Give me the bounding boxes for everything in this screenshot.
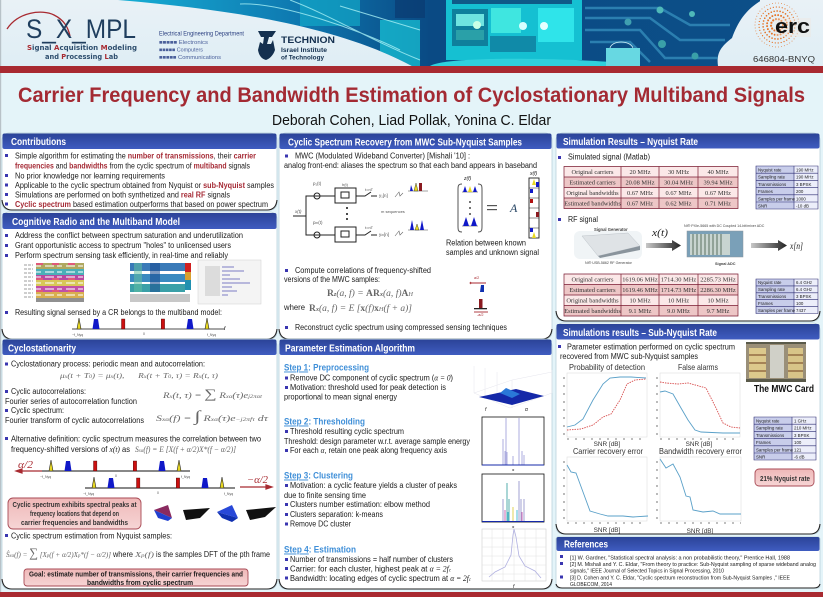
table: RF signal results: Estimated carriers [569, 287, 616, 294]
diagram: MWC block diagram: t=nT [365, 187, 374, 192]
chart: spectrum shifted by alpha over 2: f_Nyq [181, 475, 190, 479]
chart: clustered peaks: α [512, 524, 515, 529]
diagram: MWC block diagram [293, 181, 428, 242]
heading: contributions [2, 134, 276, 149]
heading: parameter estimation [280, 340, 552, 355]
table: RF signal results: 10 MHz [629, 298, 651, 304]
chart: spectrum shifted by alpha over 2: −f_Nyq [40, 475, 51, 479]
table: simulated signal results: 20.08 MHz [625, 180, 655, 186]
table: RF signal settings: Transmissions [758, 294, 787, 299]
text block: cognitive radio bullets [5, 231, 243, 260]
text block: contributions bullets: Simulations are performed on both synthetized and real RF signals [15, 190, 230, 200]
text block: compute correlations: Compute correlations of frequency-shifted [295, 266, 431, 275]
diagram: matrix equation: z(f) [463, 176, 472, 182]
text block: reference list: [1] W. Gardner, "Statistical spectral analysis: a non probabilistic theory," Prentice Hall, 1988 [570, 556, 790, 562]
table: simulated signal results: 0.67 MHz [705, 190, 731, 197]
table: sub-nyquist settings: 121 [794, 447, 802, 452]
table: simulated signal settings [756, 166, 818, 209]
heading: parameter estimation: Parameter Estimation Algorithm [285, 344, 415, 354]
chart: multiband spectrum [72, 318, 226, 337]
table: RF signal settings: Nyquist rate [758, 280, 782, 285]
diagram: matrix equation: A [509, 201, 518, 215]
text block: compute correlations: versions of the MWC samples: [284, 275, 380, 284]
text block: cognitive radio bullets: Address the conflict between spectrum saturation and underutilization [15, 231, 243, 240]
callout: 21% Nyquist rate [755, 469, 814, 486]
table: simulated signal results: 0.67 MHz [627, 190, 653, 197]
chart: spectrum shifted by alpha over 2: α/2 [18, 460, 33, 471]
text block: step 2: Threshold: design parameter w.r.t. average sample energy [284, 437, 470, 446]
text block: step 3: due to finite sensing time [284, 491, 367, 500]
text block: compute correlations [284, 266, 431, 284]
text block: step 3: Motivation: a cyclic feature yields a cluster of peaks [290, 481, 457, 490]
text block: alternative definition: Alternative definition: cyclic spectrum measures the correlation between two [11, 434, 262, 444]
text block: step 1: proportional to mean signal energy [284, 392, 397, 402]
chart: thresholded peaks: α [512, 467, 515, 472]
table: sub-nyquist settings: 100 [794, 440, 802, 445]
text block: step 4: Carrier: for each cluster, highest peak at α = 2fc [290, 564, 452, 574]
table: RF signal results: 9.0 MHz [667, 308, 690, 315]
table: simulated signal settings: 200 [796, 189, 804, 194]
text block: step 3: Step 3: Clustering [284, 470, 353, 482]
text block: definitions [5, 360, 205, 425]
diagram: MWC block diagram: pₘ(t) [313, 220, 323, 225]
logo: electrical engineering department: ■■■■■ Electronics [159, 40, 208, 46]
table: RF signal results: 9.1 MHz [629, 308, 652, 315]
chart: peak cluster decay: f [513, 584, 515, 590]
logo: Technion: TECHNION [281, 35, 335, 46]
chart: spectrum allocation table [24, 263, 84, 302]
icon: shift arrows [470, 276, 488, 317]
arrow: ADC to x[n] [751, 240, 787, 251]
text: SNR axis 4: SNR [dB] [687, 528, 714, 535]
heading: cyclic spectrum recovery [280, 134, 552, 149]
icon: PXI signal ADC: NI® PXIe-5665 with DC Coupled 14-bit/mixer ADC [684, 224, 765, 228]
logo: SAMPL lab: Signal Acquisition Modeling [27, 44, 137, 52]
table: simulated signal settings: Sampling rate [758, 175, 786, 180]
text block: step 4: Number of transmissions = half number of clusters [290, 555, 453, 564]
table: simulated signal results: 0.67 MHz [627, 200, 653, 208]
table: simulated signal settings: 3 BPSK [796, 182, 811, 187]
chart: probability of detection [564, 373, 647, 439]
text block: MWC intro: MWC (Modulated Wideband Converter) [Mishali '10] : [295, 152, 470, 160]
table: RF signal results: 2286.30 MHz [700, 287, 736, 294]
text: SNR axis 2: SNR [dB] [686, 441, 713, 448]
formula: spectrum estimator: is the samples DFT of the pth frame [156, 550, 270, 559]
banner monitor [430, 0, 640, 66]
text block: contributions bullets: Cyclic spectrum based estimation outperforms that based on power spectrum [15, 200, 268, 209]
table: simulated signal settings: SNR [758, 204, 767, 208]
logo: ERC: erc [775, 16, 810, 38]
table: RF signal results: Original carriers [571, 276, 614, 284]
chart: spectrum utilization bars [198, 260, 261, 304]
diagram: MWC block diagram: m sequences [381, 209, 405, 214]
text block: step 1 [284, 362, 453, 402]
text block: contributions bullets: Simple algorithm for estimating the number of transmissions, their carrier [15, 152, 256, 160]
text block: alternative definition: frequency-shifted versions of x(t) as [11, 445, 130, 454]
chart: thresholded peaks [482, 417, 544, 472]
table: RF signal results: Original bandwidths [566, 298, 619, 304]
icon: shift arrows: a/2 [474, 276, 479, 280]
text block: step 4: Step 4: Estimation [284, 544, 356, 556]
diagram: MWC block diagram: h(t) [342, 182, 349, 187]
logo: Technion: of Technology [281, 54, 324, 62]
formula: where Rx: where [283, 303, 306, 312]
callout: 21% Nyquist rate: 21% Nyquist rate [760, 474, 810, 483]
chart: bandwidth recovery error [657, 457, 741, 523]
text: multiband sentence: Resulting signal sensed by a CR belongs to the multiband model: [15, 308, 222, 317]
chart: 3D cyclic spectrum: f [485, 407, 487, 413]
text block: MWC intro: analog front-end: aliases the spectrum so that each band appears in baseband [284, 161, 537, 170]
table: sub-nyquist settings: Transmissions [756, 433, 785, 438]
icon: signal generator: Signal Generator [594, 227, 628, 232]
icon: signal generator [574, 227, 642, 265]
formula: correlation relation: Rz(a, f) = ARx(a, f)AH [327, 288, 414, 298]
table: simulated signal results: Original bandwidths [566, 190, 619, 197]
text block: step 3: Clusters separation: k-means [290, 510, 383, 519]
text block: sub-nyquist intro: recovered from MWC sub-Nyquist samples [560, 352, 698, 361]
table: simulated signal results: Estimated carriers [569, 180, 616, 186]
text: reconstruct cyclic spectrum: Reconstruct cyclic spectrum using compressed sensing techniques [295, 323, 507, 332]
formula: cyclic spectrum: S xα(f) = ∫ R xα(τ)e −j2πfτ dτ [156, 409, 270, 425]
table: RF signal results: 2285.73 MHz [700, 276, 736, 284]
table: sub-nyquist settings: Sampling rate [756, 426, 784, 431]
table: RF signal settings: Frames [758, 301, 774, 306]
heading: simulation nyquist [556, 134, 820, 148]
text block: sub-nyquist intro: Parameter estimation performed on cyclic spectrum [567, 342, 735, 352]
chart: spectrum shifted by minus alpha over 2: f_Nyq [224, 492, 233, 496]
text block: definitions: Fourier series of autocorrelation function [5, 397, 137, 406]
logo: electrical engineering department: ■■■■■ Computers [159, 48, 203, 54]
authors: Deborah Cohen, Liad Pollak, Yonina C. Eldar [272, 113, 551, 129]
icon: PXI signal ADC [684, 224, 765, 266]
text block: reference list [560, 555, 816, 588]
heading: sub-nyquist: Simulations results – Sub-Nyquist Rate [563, 328, 717, 339]
chart: multiband spectrum: f [224, 326, 226, 332]
chart: false alarms [657, 373, 740, 439]
table: sub-nyquist settings: Frames [756, 440, 772, 445]
logo: SAMPL lab: S_X_MPL [26, 14, 136, 44]
text block: step 2 [284, 416, 470, 455]
text block: step 3: Remove DC cluster [290, 520, 351, 528]
chart: 3D cyclic spectrum: α [525, 407, 528, 413]
text: SNR axis 3: SNR [dB] [594, 527, 621, 534]
chart: 3D cyclic spectrum [474, 366, 552, 413]
text block: reference list: signals," IEEE Journal of Selected Topics in Signal Processing, 2010 [570, 568, 724, 574]
heading: contributions: Contributions [11, 137, 66, 148]
text: relation caption: samples and unknown signal [446, 248, 539, 257]
footer red band [0, 592, 823, 597]
diagram: matrix equation [458, 171, 539, 238]
panel: simulations results sub-nyquist [556, 323, 820, 535]
text block: step 4 [284, 544, 472, 583]
table: simulated signal results: 30.04 MHz [664, 180, 693, 186]
callout: goal [24, 569, 248, 587]
formula: cyclic autocorrelation: R x(t, τ) = ∑ R xα(τ)e j2παt [162, 386, 263, 401]
text: x(t): x(t) [651, 228, 669, 239]
table: simulated signal results: 0.62 MHz [666, 200, 692, 208]
chart: spectrum shifted by minus alpha over 2: 0 [157, 491, 159, 495]
table: sub-nyquist settings: Nyquist rate [756, 418, 780, 424]
heading: cognitive radio: Cognitive Radio and the Multiband Model [12, 217, 180, 228]
formula: spectrum estimator [6, 545, 270, 560]
panel: cyclostationarity [2, 339, 277, 589]
text: relation caption [446, 238, 539, 257]
chart: spectrum shifted by minus alpha over 2 [83, 475, 272, 496]
panel: contributions [2, 133, 277, 210]
text block: step 2: Threshold resulting cyclic spectrum [290, 427, 404, 436]
text block: definitions: Cyclic spectrum: [11, 406, 64, 415]
logo: SAMPL lab [7, 12, 137, 61]
table: simulated signal results: Original carriers [571, 169, 614, 176]
logo: ERC: 646804-BNYQ [753, 55, 815, 64]
banner red band [0, 66, 823, 73]
chart: multiband spectrum: −f_Nyq [72, 333, 83, 337]
table: simulated signal results: Estimated bandwidths [564, 200, 621, 208]
table: RF signal results: 1714.30 MHz [661, 276, 696, 284]
formula: spectrum estimator: where [112, 550, 133, 559]
text block: contributions bullets: frequencies and bandwidths from the cyclic spectrum of multiband signals [15, 162, 250, 170]
callout: spectral peaks: carrier frequencies and bandwidths [21, 518, 128, 527]
table: RF signal settings: Sampling rate [758, 287, 786, 292]
text block: cognitive radio bullets: Grant opportunistic access to spectrum "holes" to unlicensed users [15, 241, 231, 250]
chart: spectrum shifted by minus alpha over 2: −f_Nyq [83, 492, 94, 496]
diagram: matrix equation: x(f) [529, 171, 538, 177]
heading: sub-nyquist [556, 324, 820, 340]
text block: contributions bullets: Applicable to the cyclic spectrum obtained from Nyquist or sub-Nyquist samples [15, 181, 274, 190]
icon: aliased spectra [408, 183, 428, 230]
chart: cyclic spectrum 3D plots [154, 505, 276, 522]
table: simulated signal results: 0.71 MHz [705, 200, 731, 208]
logo: electrical engineering department: ■■■■■ Communications [159, 55, 221, 61]
table: RF signal settings: 6.4 GHz [796, 287, 812, 292]
text: SNR axis 1: SNR [dB] [594, 441, 621, 448]
table: simulated signal results: 40 MHz [707, 169, 729, 176]
table: RF signal results: 1714.73 MHz [661, 287, 696, 294]
table: simulated signal settings: -10 dB [796, 204, 809, 208]
table: simulated signal settings: Frames [758, 189, 774, 194]
table: RF signal results: 10 MHz [707, 298, 729, 304]
logo: ERC [753, 3, 815, 64]
heading: cognitive radio [2, 213, 276, 229]
heading: references: References [564, 540, 608, 550]
text block: step 1: Step 1: Preprocessing [284, 362, 369, 374]
chart title: false alarms: False alarms [678, 363, 718, 372]
table: RF signal settings [756, 279, 818, 314]
panel: cyclic spectrum recovery [279, 133, 552, 339]
table: RF signal results: 1619.06 MHz [622, 276, 658, 284]
text block: step 1: Motivation: threshold used for peak detection is [290, 383, 446, 392]
icon: shift arrows: -a/2 [477, 313, 484, 317]
diagram: MWC block diagram: p₁(t) [313, 181, 322, 186]
text: x[n]: x[n] [789, 241, 803, 251]
text: the MWC card: The MWC Card [754, 384, 814, 395]
text block: contributions bullets: No prior knowledge nor learning requirements [15, 172, 165, 180]
arrow: generator to ADC [646, 240, 681, 251]
text block: sub-nyquist intro [558, 342, 735, 361]
formula: spectrum estimator: Ŝxα(f) = ∑ [Xp(f + α/2)Xp*(f − α/2)] [6, 545, 111, 560]
diagram: MWC block diagram: y₁[n] [379, 193, 388, 198]
text block: reference list: GLOBECOM, 2014 [570, 582, 613, 588]
table: RF signal settings: 3 BPSK [796, 294, 811, 299]
chart: multiband spectrum: 0 [143, 332, 145, 336]
logo: SAMPL lab: and Processing Lab [45, 53, 118, 61]
diagram: MWC block diagram: yₘ[n] [379, 232, 389, 237]
table: RF signal settings: 100 [796, 301, 804, 306]
heading: simulation nyquist: Simulation Results – Nyquist Rate [563, 137, 698, 148]
callout: goal: Goal: estimate number of transmissions, their carrier frequencies and [29, 570, 243, 578]
table: RF signal results: Estimated bandwidths [564, 308, 621, 315]
text block: step 4: Bandwidth: locating edges of cyclic spectrum at α = 2fc [290, 574, 472, 583]
heading: cyclostationarity: Cyclostationarity [8, 344, 76, 354]
formula: periodic mean and autocorrelation: μx(t + T 0) = μ x(t), R x(t + T 0, τ) = R x(t, τ) [60, 371, 219, 380]
logo: Technion [258, 31, 335, 62]
formula: where Rx: Rx(a, f) = E [x(f)xH(f + a)] [309, 303, 413, 313]
table: sub-nyquist settings: 3 BPSK [794, 433, 809, 438]
table: RF signal results [564, 274, 738, 316]
callout: spectral peaks: frequency locations that depend on [30, 509, 119, 518]
text block: step 2: For each α, retain one peak along frequency axis [290, 446, 447, 455]
text block: step 3: Clusters number estimation: elbow method [290, 500, 430, 509]
text block: step 2: Step 2: Thresholding [284, 416, 365, 428]
table: simulated signal settings: 190 MHz [796, 175, 814, 180]
chart: spectrum shifted by minus alpha over 2: −α/2 [247, 475, 268, 486]
panel: cognitive radio [2, 212, 277, 339]
icon: PXI signal ADC: Signal ADC [715, 262, 736, 266]
table: sub-nyquist settings: Samples per frame [756, 447, 794, 452]
callout: spectral peaks: Cyclic spectrum exhibits spectral peaks at [12, 500, 137, 509]
chart: clustered peaks [482, 474, 544, 529]
chart: multiband spectrum: f_Nyq [207, 333, 216, 337]
callout: goal: bandwidths from cyclic spectrum [87, 578, 193, 587]
text block: reference list: [3] D. Cohen and Y. C. Eldar, "Cyclic spectrum reconstruction from Sub-Nyquist Samples ," IEEE [570, 576, 790, 582]
diagram: MWC block diagram: x(t) [294, 209, 302, 214]
table: simulated signal results [564, 166, 738, 208]
table: simulated signal settings: Nyquist rate [758, 168, 782, 172]
text block: definitions: Cyclostationary process: periodic mean and autocorrelation: [11, 360, 205, 368]
text: relation caption: Relation between known [446, 238, 526, 248]
chart: carrier recovery error [564, 457, 648, 523]
table: simulated signal settings: 1000 [796, 196, 806, 201]
table: simulated signal results: 30 MHz [668, 169, 689, 176]
panel: references [556, 537, 820, 588]
diagram: RF acquisition chain [574, 224, 803, 266]
logo: electrical engineering department: Electrical Engineering Department [159, 30, 244, 38]
title: Carrier Frequency and Bandwidth Estimation of Cyclostationary Multiband Signals [18, 84, 805, 107]
text block: cognitive radio bullets: Perform spectrum sensing task efficiently, in real-time and reliably [15, 251, 228, 260]
table: sub-nyquist settings: 1 GHz [794, 418, 806, 424]
formula: spectrum estimator: X p(f) [134, 550, 155, 559]
chart: spectrum shifted by alpha over 2: 0 [115, 474, 117, 478]
chart: spectrum occupancy heat map [130, 263, 191, 302]
text: cyclic spectrum estimation: Cyclic spectrum estimation from Nyquist samples: [11, 532, 172, 540]
table: RF signal results: 10 MHz [668, 298, 689, 304]
table: RF signal settings: 6.4 GHz [796, 280, 812, 285]
chart title: probability of detection: Probability of detection [569, 363, 645, 372]
text block: alternative definition: Sxα(f) = E [X(f + α/2)X*(f − α/2)] [135, 445, 236, 454]
table: simulated signal results: 39.94 MHz [703, 180, 733, 186]
chart title: carrier recovery error: Carrier recovery error [573, 447, 643, 456]
text block: contributions bullets [5, 152, 274, 209]
table: simulated signal results: 0.67 MHz [666, 190, 692, 197]
text block: definitions: Fourier transform of cyclic autocorrelations [5, 416, 144, 425]
callout: spectral peaks [8, 498, 141, 529]
heading: references [556, 537, 820, 551]
icon: signal generator: NI® USB-5862 RF Generator [585, 261, 633, 265]
panel: simulation results nyquist [556, 133, 820, 321]
text: simulated signal: Simulated signal (Matlab) [568, 152, 650, 162]
chart: peak cluster decay [482, 529, 546, 590]
text block: alternative definition [5, 434, 262, 454]
table: sub-nyquist settings: SNR [756, 454, 765, 460]
chart title: bandwidth recovery error: Bandwidth recovery error [659, 447, 742, 456]
table: simulated signal settings: 190 MHz [796, 168, 814, 172]
text block: step 3 [284, 470, 457, 528]
panel: parameter estimation algorithm [279, 339, 552, 590]
text: RF signal: RF signal [568, 215, 598, 224]
table: simulated signal settings: Transmissions [758, 182, 787, 187]
text block: MWC intro [284, 152, 537, 170]
text: RF signal [558, 215, 598, 224]
text block: step 1: Remove DC component of cyclic spectrum (α = 0) [290, 374, 453, 382]
chart: spectrum shifted by alpha over 2 [16, 460, 190, 479]
table: sub-nyquist settings [754, 417, 816, 460]
table: simulated signal results: 20 MHz [629, 169, 651, 176]
logo: Technion: Israel Institute [281, 47, 327, 54]
table: sub-nyquist settings: -6 dB [794, 454, 805, 460]
table: RF signal results: 9.7 MHz [707, 308, 730, 315]
table: simulated signal settings: Samples per frame [758, 196, 796, 201]
heading: cyclostationarity [2, 340, 276, 355]
table: RF signal results: 1619.46 MHz [622, 287, 658, 294]
diagram: MWC block diagram: t=nT [365, 225, 374, 230]
text block: definitions: Cyclic autocorrelations: [11, 387, 86, 396]
image: MWC card photo [746, 342, 806, 382]
table: RF signal settings: 7437 [796, 308, 806, 313]
table: sub-nyquist settings: 210 MHz [794, 426, 812, 431]
table: RF signal settings: Samples per frame [758, 308, 796, 313]
heading: cyclic spectrum recovery: Cyclic Spectrum Recovery from MWC Sub-Nyquist Samples [288, 138, 522, 148]
logo: electrical engineering department [159, 30, 244, 61]
